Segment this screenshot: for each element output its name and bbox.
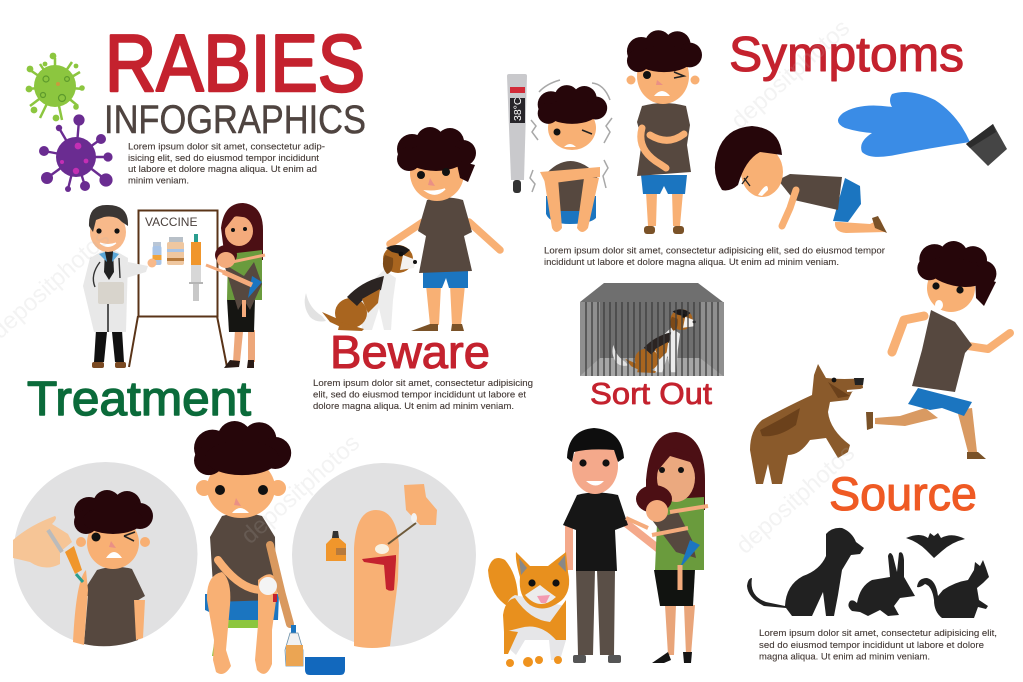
text block: intro xyxy=(128,142,325,186)
silhouette: rabbit xyxy=(848,552,915,616)
icon: cotton swab and hand xyxy=(375,484,437,554)
heading: symptoms: Symptoms xyxy=(729,28,964,82)
icon: thermometer xyxy=(507,74,527,193)
corgi dog xyxy=(488,552,569,667)
cage with dog xyxy=(580,283,724,376)
icon: green virus xyxy=(26,53,85,121)
symptoms: vomiting boy xyxy=(715,126,887,233)
baby xyxy=(626,485,708,590)
running boy xyxy=(866,234,1010,459)
silhouette: cat xyxy=(917,560,989,618)
silhouette: dog xyxy=(747,528,864,616)
title: INFOGRAPHICS xyxy=(104,98,366,142)
title xyxy=(104,19,366,142)
watermark: depositphotos xyxy=(236,429,365,549)
watermark xyxy=(0,14,860,559)
text block: beware: Lorem ipsum dolor sit amet, consectetur adipisicing xyxy=(313,378,533,389)
mother with baby xyxy=(206,203,265,368)
text block: intro: Lorem ipsum dolor sit amet, consectetur adip- xyxy=(128,142,325,152)
dog: beagle sitting xyxy=(305,245,417,331)
watermark: depositphotos xyxy=(726,14,855,134)
heading: source: Source xyxy=(829,467,977,520)
vaccine board: VACCINE xyxy=(145,215,197,229)
text block: symptoms: Lorem ipsum dolor sit amet, consectetur adipisicing elit, sed do eiusmod tempor xyxy=(544,246,886,256)
text block: source: Lorem ipsum dolor sit amet, consectetur adipisicing elit, xyxy=(759,628,997,639)
family with pet xyxy=(488,428,708,667)
icon: large vial xyxy=(167,237,184,265)
heading: sort out: Sort Out xyxy=(590,376,712,411)
woman with baby xyxy=(626,432,708,663)
text block: beware xyxy=(313,378,533,412)
icon: antiseptic bottle xyxy=(326,531,346,561)
text block: intro: isicing elit, sed do eiusmod tempor incididunt xyxy=(128,153,319,164)
text block: source: magna aliqua. Ut enim ad minim veniam. xyxy=(759,652,930,662)
icon: bottle xyxy=(285,625,303,666)
text block: source: sed do eiusmod tempor incididunt ut labore et dolore xyxy=(759,640,984,651)
symptoms: shivering boy xyxy=(530,80,612,232)
icon: hand with syringe xyxy=(13,516,83,582)
text block: intro: minim veniam. xyxy=(128,176,189,186)
symptoms: boy holding stomach xyxy=(626,30,702,234)
silhouettes: animal sources xyxy=(747,528,989,618)
text block: beware: dolore magna aliqua. Ut enim ad minim veniam. xyxy=(313,401,514,412)
silhouette: bat xyxy=(906,533,965,558)
baby xyxy=(206,245,265,317)
icon: syringe on board xyxy=(189,234,203,301)
icon: small vial xyxy=(152,242,162,265)
doctor xyxy=(83,205,156,368)
panel: boy washing wound xyxy=(194,421,345,675)
icon: purple virus xyxy=(39,114,113,192)
man xyxy=(563,428,660,663)
title: RABIES xyxy=(105,19,365,109)
text block: beware: elit, sed do eiusmod tempor incididunt ut labore et xyxy=(313,390,526,400)
angry brown dog xyxy=(750,364,864,484)
icon: thermometer: 38°C xyxy=(512,97,524,121)
heading: treatment: Treatment xyxy=(27,373,251,426)
beware: boy petting dog xyxy=(390,127,500,331)
vaccine board xyxy=(129,210,227,367)
wound blood xyxy=(362,555,396,591)
text block: symptoms: incididunt ut labore et dolore magna aliqua. Ut enim ad minim veniam. xyxy=(544,257,839,268)
text block: symptoms xyxy=(544,246,886,268)
panel: vaccination circle xyxy=(13,462,198,646)
watermark: depositphotos xyxy=(731,439,860,559)
panel: wound cleaning circle xyxy=(292,463,476,648)
icon: blue bowl xyxy=(305,657,345,675)
text block: source xyxy=(759,628,997,662)
heading: beware: Beware xyxy=(330,326,490,378)
icon: water spilling from bucket xyxy=(838,92,1007,166)
text block: intro: ut labore et dolore magna aliqua. Ut enim ad xyxy=(128,164,317,175)
